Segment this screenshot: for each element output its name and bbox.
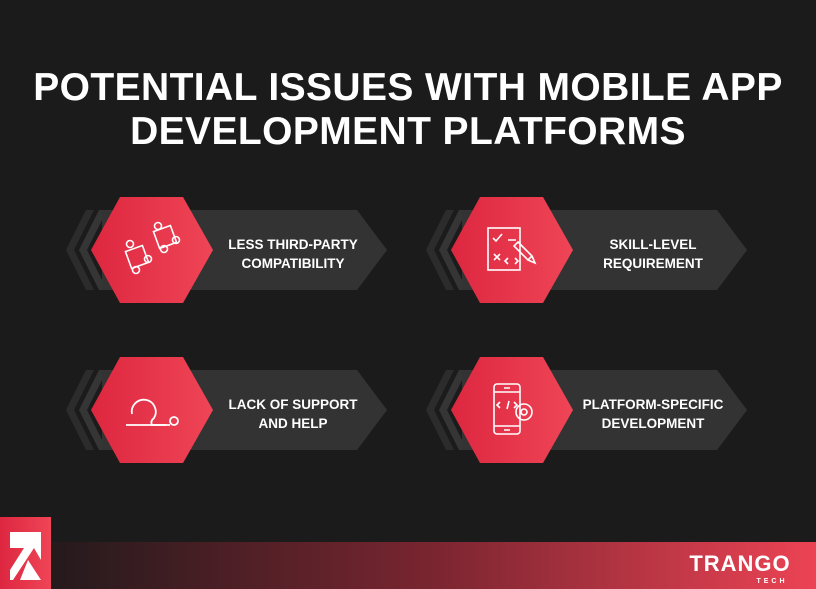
card: lack of support and help: AND HELP — [258, 416, 328, 431]
title — [33, 66, 783, 153]
text: LESS THIRD-PARTY — [228, 237, 358, 252]
card: less third-party compatibility: COMPATIBILITY — [242, 256, 344, 271]
icon: checklist — [488, 228, 535, 270]
logo text: TECH — [756, 578, 788, 585]
title: DEVELOPMENT PLATFORMS — [130, 110, 686, 153]
card: platform-specific development: DEVELOPMENT — [602, 416, 705, 431]
card: platform-specific development — [426, 357, 747, 463]
text: LACK OF SUPPORT — [228, 397, 358, 412]
card: less third-party compatibility — [66, 197, 387, 303]
card: skill-level requirement — [426, 197, 747, 303]
card: skill-level requirement: REQUIREMENT — [603, 256, 704, 271]
icon: question — [126, 400, 178, 425]
text: PLATFORM-SPECIFIC — [583, 397, 724, 412]
logo text: TRANGO — [689, 551, 791, 576]
title: POTENTIAL ISSUES WITH MOBILE APP — [33, 66, 783, 109]
card: lack of support and help — [66, 357, 387, 463]
icon: puzzle — [125, 222, 180, 274]
text: SKILL-LEVEL — [610, 237, 696, 252]
icon: phone with gear — [494, 384, 532, 434]
logo square — [0, 517, 51, 589]
footer bar — [51, 542, 816, 589]
